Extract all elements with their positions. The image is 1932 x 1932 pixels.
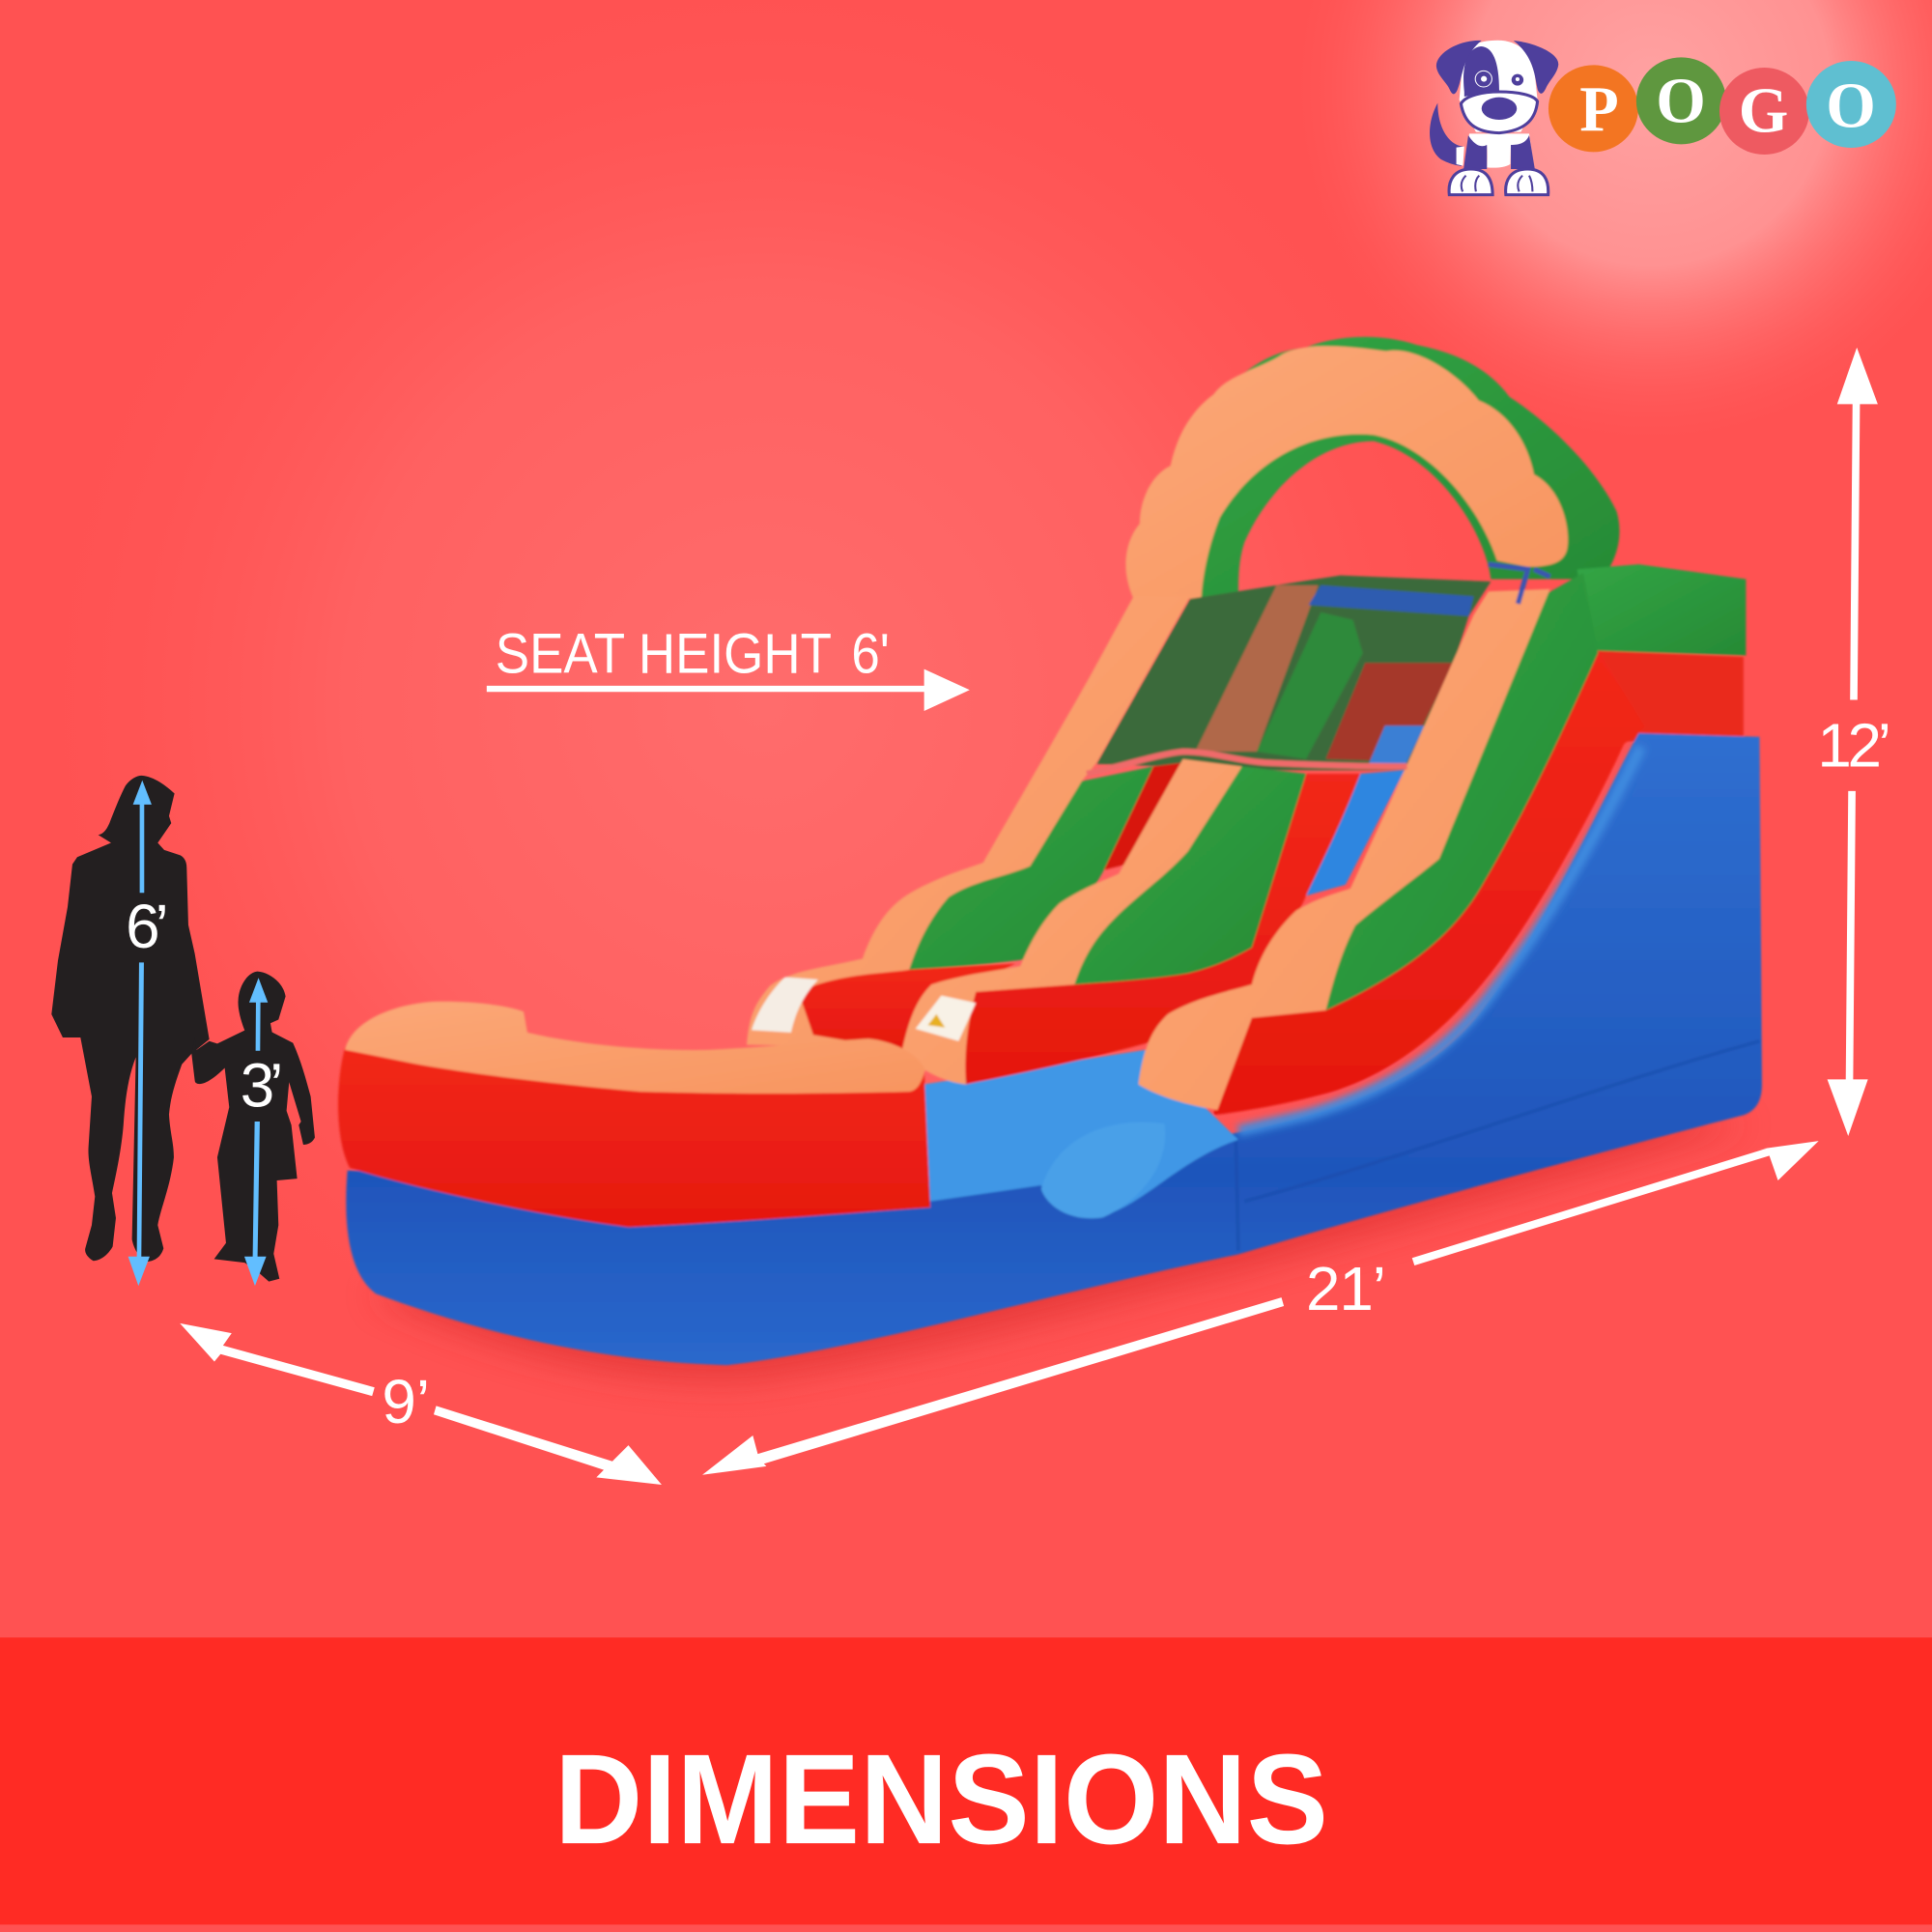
logo letters [1579,66,1876,146]
logo letters: P [1579,74,1619,145]
warning label left [752,977,818,1033]
9 ft width arrow [180,1323,662,1485]
rope [1087,752,1407,774]
front bolster red [338,1047,930,1227]
logo letters: G [1739,75,1788,146]
seat height label: SEAT HEIGHT [496,622,832,685]
label: woman height: 6’ [126,892,169,961]
logo circle blue [1806,61,1896,148]
right wall [1139,564,1645,1115]
arch orange front [1125,346,1568,599]
height arrow: woman [128,781,152,1286]
left wall [747,596,1190,1050]
seat height arrow [487,669,970,711]
logo circle red [1719,68,1809,155]
label: length: 21’ [1306,1254,1386,1323]
seat height label: 6' [851,622,890,685]
dark red strip [1104,763,1182,870]
slide back panel [1096,576,1491,770]
tower top green [1577,564,1746,656]
21 ft length arrow [702,1141,1819,1475]
logo dog [1430,41,1558,195]
silhouette: woman [51,776,210,1262]
centre slide lane blue [1306,770,1405,895]
warning label centre [916,996,976,1041]
logo circle green [1636,57,1726,144]
silhouette: child [191,972,315,1282]
label: child height: 3’ [241,1050,283,1120]
title band [0,1637,1932,1924]
height arrow: child [244,978,268,1286]
top straps [1489,564,1550,604]
logo letters: O [1826,71,1876,141]
logo [1430,41,1896,195]
blue body [346,733,1762,1365]
blue body seam [1236,1041,1759,1251]
pool water bump [1041,1122,1165,1218]
logo circle orange [1548,65,1638,152]
centre wall [902,759,1360,1084]
blue body highlight edge [1238,747,1641,1131]
pool water [924,1050,1238,1215]
tower top red [1565,650,1744,764]
front bolster orange top [345,1002,925,1094]
logo letters: O [1656,66,1706,136]
label: height: 12’ [1817,710,1891,780]
arch green back [1200,337,1619,598]
label: width: 9’ [382,1367,430,1436]
12 ft height arrow [1828,348,1878,1136]
inflatable water slide [338,337,1762,1365]
title: DIMENSIONS [554,1728,1328,1871]
ground shadow under slide [370,1109,1749,1380]
